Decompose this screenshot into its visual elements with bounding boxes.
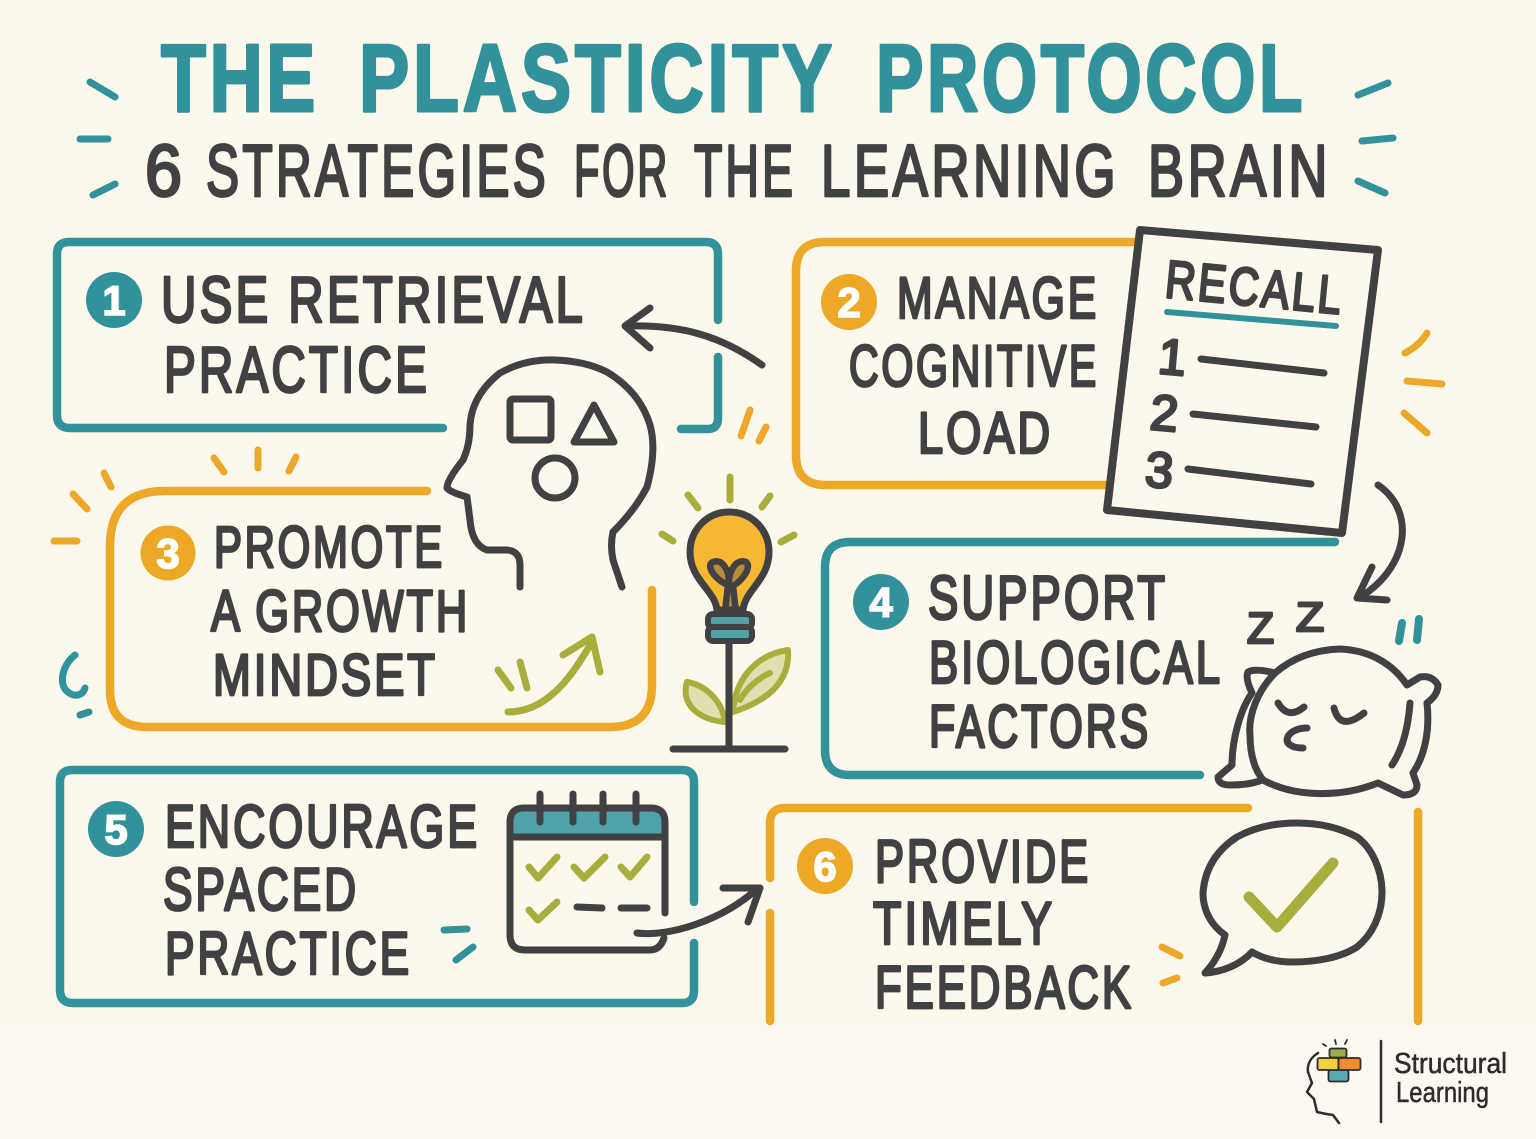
title: PLASTICITY <box>359 25 836 132</box>
heading 6: PROVIDE <box>875 828 1091 895</box>
subtitle: STRATEGIES <box>206 131 549 212</box>
number badge 6 <box>797 838 853 894</box>
heading 6 <box>873 828 1134 1021</box>
accent ticks by checklist <box>1404 333 1442 433</box>
panel: 3 promote a growth mindset <box>110 491 652 727</box>
number badge 5: 5 <box>104 806 128 853</box>
accent ticks by head <box>741 410 766 441</box>
icon: head with shapes <box>447 360 653 587</box>
heading 2 <box>849 266 1099 466</box>
arrow: checklist to retrieval <box>625 308 762 365</box>
heading 5 <box>163 793 480 987</box>
number badge 6: 6 <box>813 843 837 890</box>
arrow: checklist to sleep <box>1357 485 1402 600</box>
heading 4: FACTORS <box>929 693 1151 760</box>
logo head <box>1307 1053 1339 1123</box>
accent ticks and curl by panel 3 <box>54 450 296 715</box>
logo: structural learning <box>1307 1040 1507 1123</box>
heading 3 <box>211 515 470 708</box>
leaves <box>686 650 788 722</box>
heading 4 <box>928 564 1223 760</box>
heading 2: LOAD <box>918 401 1053 466</box>
heading 2: COGNITIVE <box>849 334 1099 399</box>
heading 3: A GROWTH <box>211 579 470 644</box>
heading 4: BIOLOGICAL <box>929 629 1223 696</box>
list numbers: 2 <box>1148 384 1181 442</box>
heading 6: FEEDBACK <box>875 954 1134 1021</box>
heading 2: MANAGE <box>897 266 1099 331</box>
bulb rays <box>662 477 794 542</box>
icon: light bulb plant <box>662 477 794 749</box>
heading 4: SUPPORT <box>928 564 1168 633</box>
number badge 1 <box>86 272 142 328</box>
panel: 4 support biological factors <box>825 542 1335 775</box>
subtitle: BRAIN <box>1148 131 1331 212</box>
logo divider <box>1380 1041 1382 1122</box>
logo blocks <box>1318 1048 1360 1082</box>
logo wordmark: Learning <box>1396 1077 1489 1109</box>
heading 5: ENCOURAGE <box>165 793 480 860</box>
number badge 2: 2 <box>837 279 861 326</box>
list numbers <box>1143 328 1189 499</box>
title <box>161 25 1306 132</box>
heading 5: SPACED <box>163 856 359 923</box>
heading 1: PRACTICE <box>164 333 430 406</box>
calendar checkmarks <box>529 857 647 920</box>
arrow: calendar to feedback <box>637 888 760 934</box>
subtitle: LEARNING <box>821 131 1119 212</box>
list numbers: 3 <box>1143 441 1176 499</box>
sleeping face <box>1278 703 1364 748</box>
sleep letters <box>1247 594 1324 653</box>
icon: calendar <box>510 794 665 950</box>
heading 5: PRACTICE <box>165 920 412 987</box>
number badge 2 <box>821 274 877 330</box>
title accent ticks <box>80 82 1393 195</box>
subtitle: THE <box>694 131 796 212</box>
number badge 4 <box>853 574 909 630</box>
sleep letters: Z <box>1247 604 1274 653</box>
number badge 3: 3 <box>156 530 180 577</box>
bulb base <box>708 614 752 641</box>
stem and ground <box>673 642 785 749</box>
number badge 5 <box>88 801 144 857</box>
title: THE <box>161 25 319 132</box>
icon: sleeping pillow <box>1218 594 1438 795</box>
number badge 3 <box>140 526 196 580</box>
number badge 4: 4 <box>869 579 893 626</box>
filament <box>710 561 748 612</box>
icon: speech bubble check <box>1162 823 1382 983</box>
panel: 1 use retrieval practice <box>57 242 718 429</box>
panel: 6 provide timely feedback <box>770 808 1418 1021</box>
growth arrow <box>498 637 600 712</box>
logo wordmark <box>1394 1048 1507 1109</box>
panel: 2 manage cognitive load <box>796 242 1135 485</box>
list numbers: 1 <box>1156 328 1189 386</box>
panel: 5 encourage spaced practice <box>60 770 694 1003</box>
title: PROTOCOL <box>876 25 1306 132</box>
recall label: RECALL <box>1163 250 1347 326</box>
heading 3: MINDSET <box>213 643 438 708</box>
subtitle <box>145 131 1331 212</box>
subtitle: FOR <box>574 131 670 212</box>
heading 1 <box>161 263 586 406</box>
heading 3: PROMOTE <box>214 515 445 580</box>
bulb glass <box>690 512 769 610</box>
sleep letters: Z <box>1296 594 1324 640</box>
icon: recall checklist <box>1107 230 1378 533</box>
heading 6: TIMELY <box>873 890 1055 957</box>
heading 1: USE RETRIEVAL <box>161 263 586 336</box>
logo wordmark: Structural <box>1394 1048 1507 1080</box>
number badge 1: 1 <box>102 277 126 324</box>
subtitle: 6 <box>145 131 182 212</box>
